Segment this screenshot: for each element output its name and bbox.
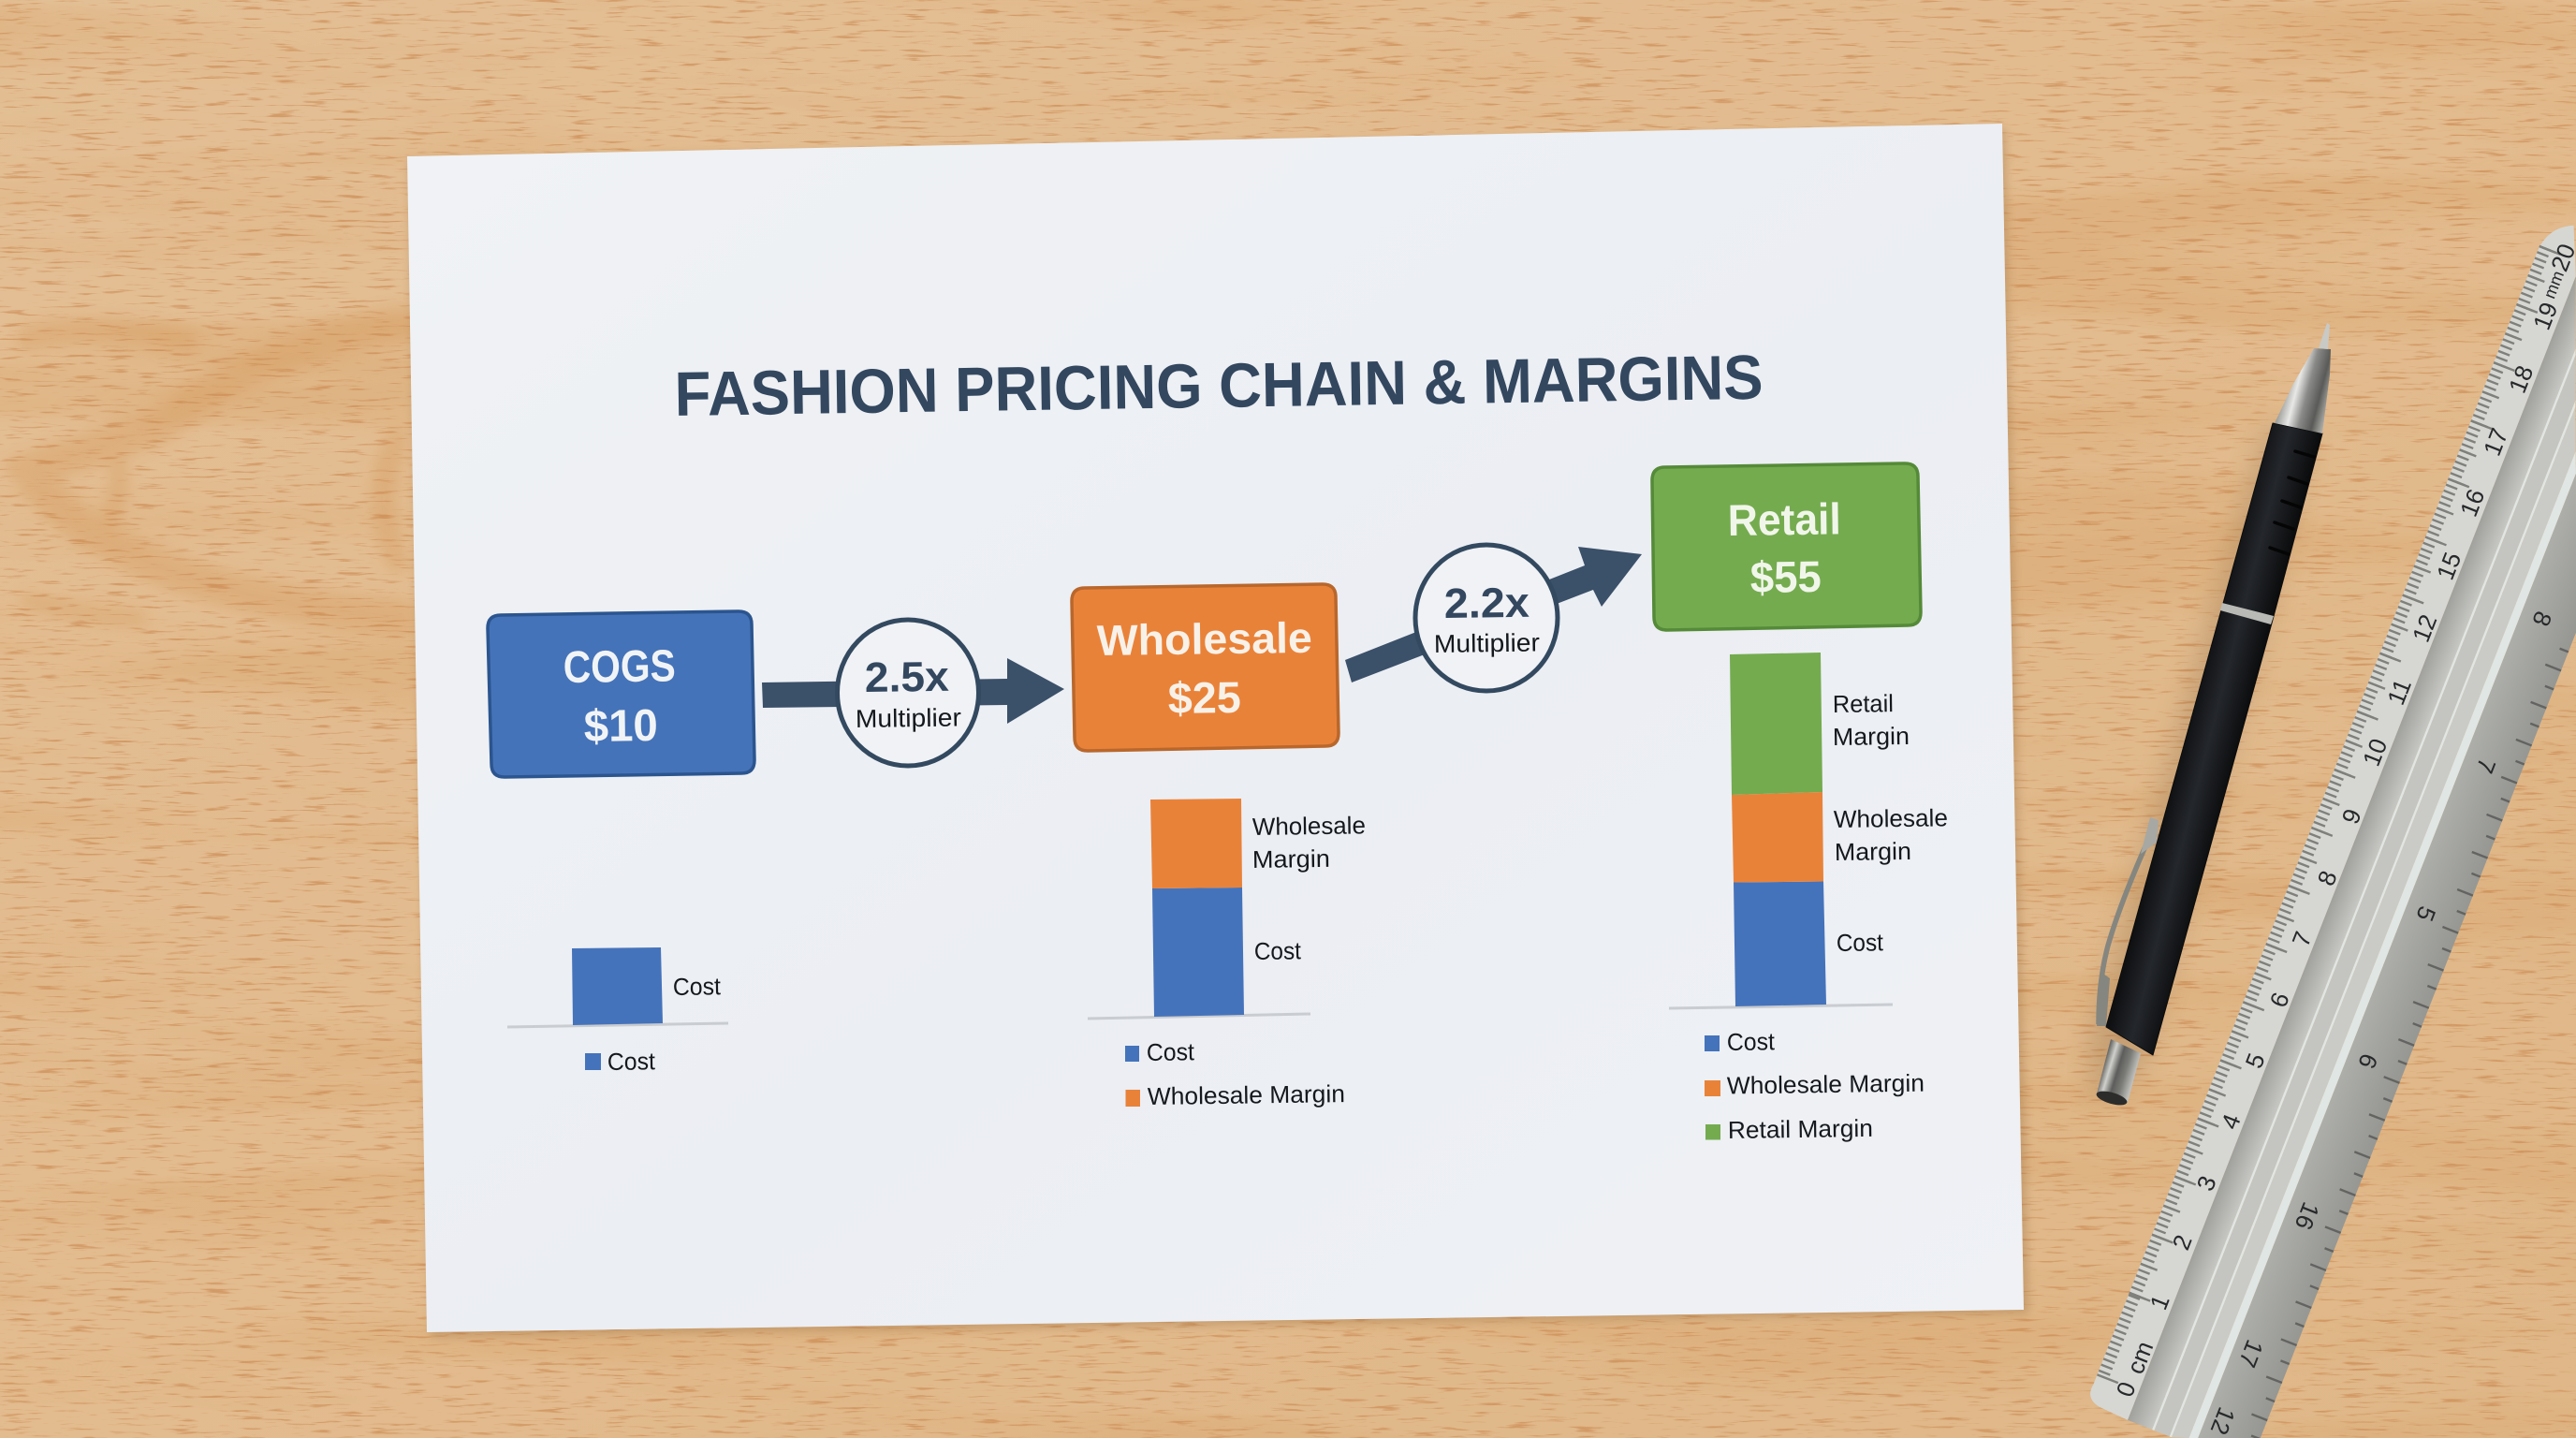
legend: Retail: Cost — [1727, 1027, 1776, 1056]
chart: COGS stacked bar: Cost — [673, 972, 722, 1001]
pen end cap — [2095, 1039, 2141, 1108]
pen clip — [2097, 817, 2159, 1026]
box: Retail $55: $55 — [1749, 551, 1822, 602]
pen shadow — [2089, 426, 2312, 1105]
legend: Retail: Retail Margin — [1728, 1114, 1873, 1144]
ruler scale numbers: 16 — [2454, 485, 2490, 521]
chart: Wholesale stacked bar: Wholesale — [1252, 811, 1366, 841]
ruler scale numbers: 5 — [2410, 902, 2442, 925]
ruler scale numbers: 19 — [2527, 299, 2563, 333]
chart: Retail stacked bar: Wholesale — [1834, 803, 1948, 833]
ruler scale numbers: 4 — [2215, 1110, 2247, 1133]
paper shadow — [409, 128, 2028, 1337]
ruler lower scale ticks — [2252, 631, 2571, 1438]
ruler scale numbers: 6 — [2263, 989, 2295, 1011]
ruler scale numbers: 10 — [2357, 735, 2393, 770]
pen metal cone — [2275, 348, 2331, 433]
chart: Retail stacked bar: Retail — [1833, 689, 1894, 718]
multiplier badge: 2.2x: Multiplier — [1434, 628, 1540, 658]
chart: Retail stacked bar: Cost — [1837, 928, 1884, 957]
legend: Wholesale: Cost — [1147, 1037, 1195, 1066]
ruler — [2086, 216, 2576, 1438]
ruler cm ticks — [2102, 246, 2551, 1380]
box: Retail $55: Retail — [1727, 493, 1841, 545]
legend: Wholesale: Wholesale Margin — [1148, 1079, 1345, 1110]
title: FASHION PRICING CHAIN & MARGINS — [674, 343, 1764, 430]
legend: COGS — [585, 1047, 656, 1076]
ruler scale numbers — [2110, 240, 2576, 1438]
box: COGS $10: COGS — [563, 641, 676, 693]
box: Retail $55 — [1652, 463, 1921, 630]
ruler scale numbers: 12 — [2205, 1403, 2241, 1438]
ruler scale numbers: 5 — [2239, 1049, 2271, 1072]
ruler scale numbers: 7 — [2470, 755, 2502, 777]
legend: Retail: Wholesale Margin — [1727, 1069, 1925, 1099]
ruler scale numbers: 12 — [2407, 610, 2442, 646]
chart: Wholesale stacked bar: Margin — [1252, 844, 1330, 873]
multiplier badge: 2.5x: Multiplier — [856, 703, 961, 733]
multiplier badge: 2.2x — [1415, 545, 1558, 691]
ruler scale numbers: 1 — [2144, 1291, 2175, 1313]
box: Wholesale $25: Wholesale — [1096, 613, 1312, 665]
paper sheet — [407, 124, 2024, 1332]
chart: Retail stacked bar — [1669, 653, 1948, 1008]
multiplier badge: 2.2x: 2.2x — [1443, 579, 1530, 627]
pen — [2095, 323, 2331, 1108]
ruler scale numbers: mm — [2539, 268, 2568, 301]
ruler scale numbers: 8 — [2526, 608, 2558, 630]
pen tip — [2319, 323, 2330, 349]
chart: Retail stacked bar: Margin — [1833, 722, 1910, 751]
chart: Wholesale stacked bar — [1088, 799, 1366, 1019]
multiplier badge: 2.5x: 2.5x — [864, 653, 949, 701]
chart: COGS stacked bar — [507, 947, 728, 1027]
ruler scale numbers: 9 — [2335, 805, 2367, 828]
box: COGS $10 — [488, 611, 754, 777]
chart: Retail stacked bar: Margin — [1835, 837, 1911, 866]
ruler scale numbers: 17 — [2478, 424, 2513, 460]
ruler scale numbers: 18 — [2503, 361, 2539, 397]
pen barrel — [2106, 423, 2322, 1055]
ruler scale numbers: 2 — [2166, 1231, 2198, 1254]
multiplier badge: 2.5x — [837, 620, 979, 766]
ruler scale numbers: 17 — [2233, 1336, 2269, 1372]
ruler scale numbers: 11 — [2381, 675, 2417, 709]
arrow: Wholesale to Retail — [1345, 547, 1642, 682]
box: Wholesale $25 — [1072, 584, 1339, 751]
ruler scale numbers: 3 — [2190, 1172, 2222, 1195]
ruler scale numbers: 15 — [2431, 549, 2466, 583]
legend: Retail — [1705, 1027, 1925, 1144]
pen grip slots — [2270, 451, 2314, 554]
chart: Wholesale stacked bar: Cost — [1254, 936, 1302, 965]
ruler top scale band — [2086, 216, 2576, 1420]
ruler scale numbers: 7 — [2286, 928, 2318, 950]
ruler scale numbers: 16 — [2290, 1198, 2325, 1234]
arrow: COGS to Wholesale — [762, 658, 1064, 724]
ruler scale numbers: 6 — [2352, 1049, 2384, 1073]
box: Wholesale $25: $25 — [1167, 672, 1241, 723]
legend: Wholesale — [1125, 1037, 1345, 1110]
box: COGS $10: $10 — [583, 701, 658, 752]
ruler scale numbers: cm — [2121, 1337, 2159, 1378]
legend: COGS: Cost — [607, 1047, 656, 1076]
ruler scale numbers: 8 — [2311, 867, 2343, 889]
ruler scale numbers: 0 — [2110, 1378, 2142, 1401]
pen silver ring — [2220, 603, 2274, 624]
